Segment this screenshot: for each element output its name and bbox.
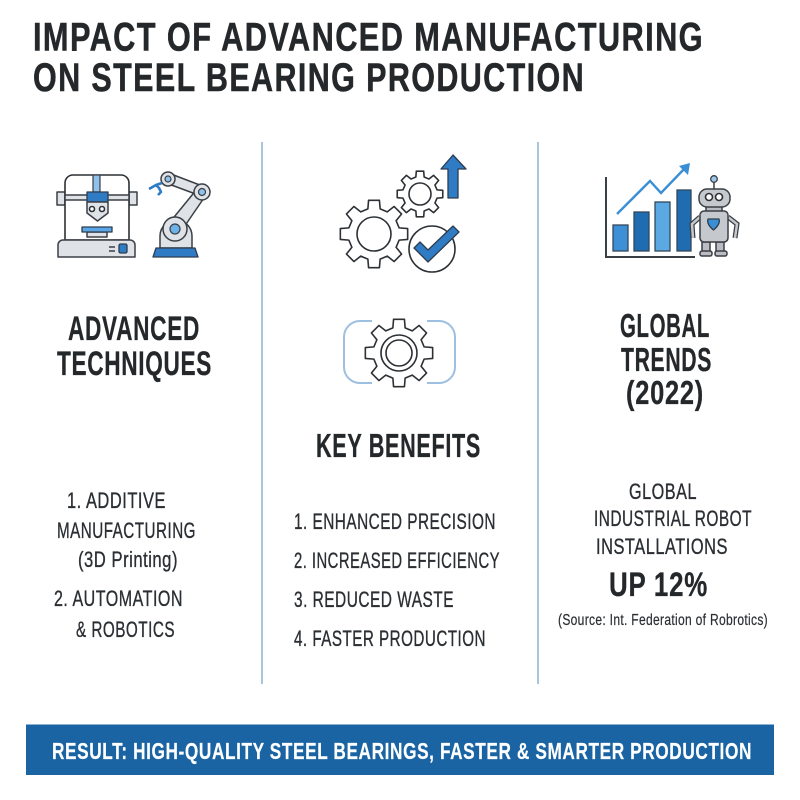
list: techniques: (3D Printing) bbox=[78, 547, 178, 572]
icon: 3D printer bbox=[57, 175, 137, 257]
icon: robot bbox=[692, 176, 737, 256]
icon: bar chart bbox=[606, 163, 695, 257]
title bbox=[33, 16, 704, 100]
heading: global trends: TRENDS bbox=[621, 341, 712, 378]
list: techniques: & ROBOTICS bbox=[76, 617, 175, 642]
text: robot installations statistic: GLOBAL bbox=[629, 479, 697, 504]
panel: key benefits bbox=[294, 155, 500, 651]
list: benefits: 2. INCREASED EFFICIENCY bbox=[294, 548, 500, 573]
heading: global trends: (2022) bbox=[626, 374, 704, 411]
list: benefits: 1. ENHANCED PRECISION bbox=[294, 509, 496, 534]
heading: global trends: GLOBAL bbox=[620, 307, 710, 344]
list: benefits: 4. FASTER PRODUCTION bbox=[294, 626, 486, 651]
icon: gear in brackets bbox=[344, 319, 455, 387]
text: robot installations statistic: INSTALLATIONS bbox=[596, 534, 728, 559]
title: ON STEEL BEARING PRODUCTION bbox=[33, 56, 585, 100]
list: techniques: 2. AUTOMATION bbox=[54, 586, 183, 611]
heading: advanced techniques: ADVANCED bbox=[68, 310, 200, 348]
list: benefits bbox=[294, 509, 500, 651]
panel: advanced techniques bbox=[54, 172, 212, 642]
list: techniques bbox=[54, 488, 196, 642]
heading: key benefits: KEY BENEFITS bbox=[316, 427, 481, 464]
heading: global trends bbox=[620, 307, 712, 411]
panel: global trends bbox=[558, 163, 768, 629]
list: techniques: 1. ADDITIVE bbox=[67, 488, 166, 513]
heading: advanced techniques bbox=[57, 310, 212, 383]
text: robot installations statistic bbox=[558, 479, 768, 629]
list: techniques: MANUFACTURING bbox=[57, 518, 196, 543]
icon: gears with check and arrow bbox=[340, 155, 466, 272]
banner: result bbox=[26, 724, 774, 775]
text: robot installations statistic: UP 12% bbox=[609, 566, 708, 604]
list: benefits: 3. REDUCED WASTE bbox=[294, 587, 454, 612]
heading: advanced techniques: TECHNIQUES bbox=[57, 345, 212, 383]
icon: robot arm bbox=[149, 172, 210, 257]
